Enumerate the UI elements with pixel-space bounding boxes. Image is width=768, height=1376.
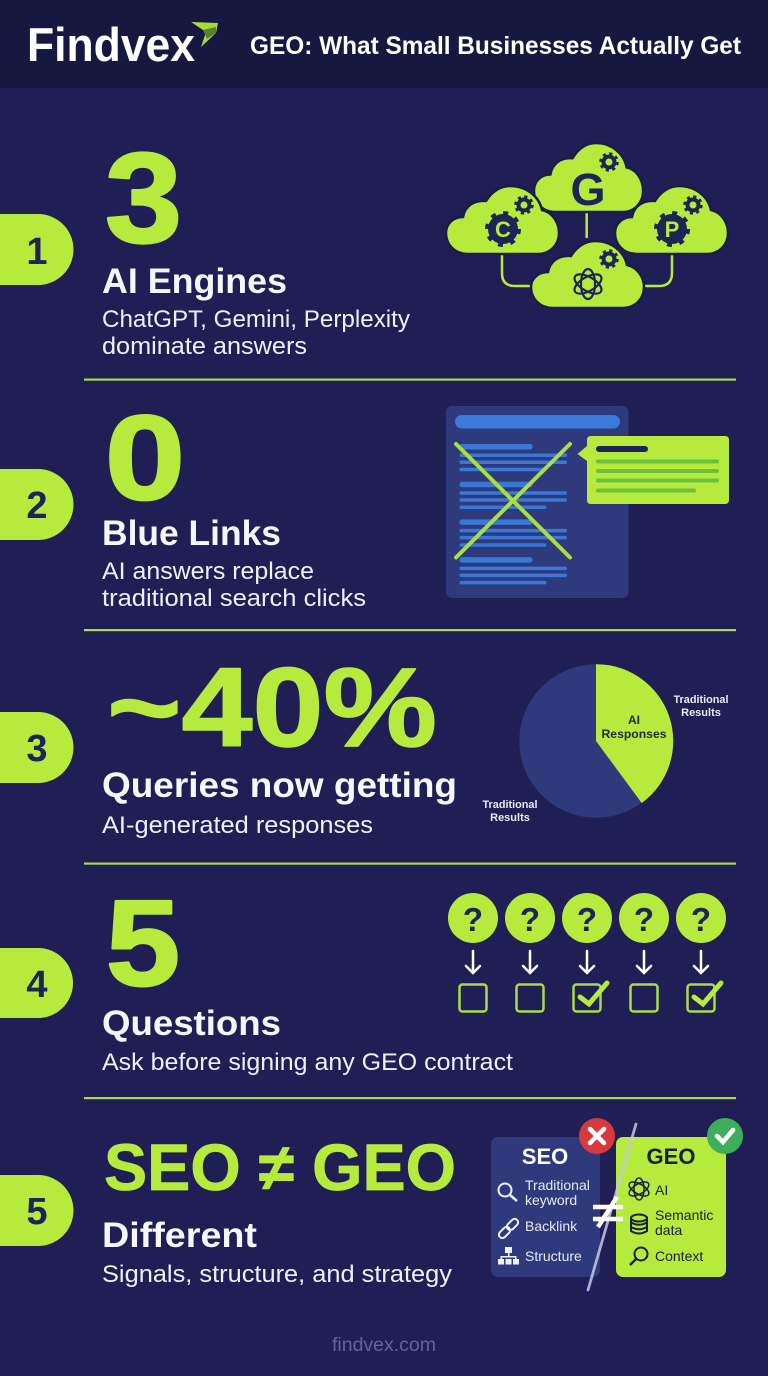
big stat 3: 3 — [105, 127, 182, 270]
icon: not-equal sign — [593, 1197, 623, 1227]
big stat 5: 5 — [106, 875, 180, 1011]
cloud: ChatGPT C: C — [495, 217, 511, 242]
card: SEO: keyword — [525, 1192, 577, 1208]
pie chart: Responses — [602, 727, 667, 741]
footer url: findvex.com — [332, 1335, 436, 1356]
illustration: question checklist: ? — [691, 901, 711, 938]
card: GEO: AI — [655, 1182, 668, 1198]
illustration: question checklist: ? — [463, 901, 483, 938]
cloud: OpenAI knot — [531, 241, 644, 308]
description: traditional search clicks — [102, 585, 366, 612]
description: Ask before signing any GEO contract — [102, 1049, 513, 1076]
illustration: question checklist: ? — [577, 901, 597, 938]
panel: section 5 SEO vs GEO — [0, 1118, 743, 1290]
illustration: question checklist: ? — [520, 901, 540, 938]
logo wordmark: Findvex — [27, 18, 195, 71]
pie chart: Results — [681, 707, 721, 719]
pie chart: Traditional — [482, 799, 538, 811]
icon: red cross badge — [579, 1118, 615, 1154]
diagram: connected AI clouds — [446, 143, 728, 308]
comparison: SEO vs GEO cards — [491, 1118, 743, 1290]
number badge 5: 5 — [26, 1191, 48, 1233]
illustration: crossed-out search page with AI answer — [446, 406, 729, 598]
card: GEO: data — [655, 1222, 682, 1238]
panel: section 2 blue links — [0, 391, 729, 612]
description — [102, 306, 411, 360]
number badge 5 — [0, 1175, 74, 1246]
cloud: Gemini — [534, 143, 643, 215]
icon: logo arrow — [191, 22, 218, 47]
description: AI answers replace — [102, 558, 314, 585]
number badge 4: 4 — [26, 964, 48, 1006]
card: GEO: Semantic — [655, 1207, 713, 1223]
heading: Blue Links — [102, 514, 281, 553]
divider slash — [588, 1124, 636, 1290]
description: Signals, structure, and strategy — [102, 1261, 453, 1288]
card: SEO — [491, 1137, 600, 1277]
card: GEO: GEO — [647, 1144, 695, 1169]
title: GEO: What Small Businesses Actually Get — [250, 32, 742, 60]
card: SEO: SEO — [522, 1144, 568, 1169]
cloud: ChatGPT C — [446, 186, 559, 254]
card: GEO — [616, 1137, 726, 1277]
panel: section 1 AI engines — [0, 127, 728, 360]
pie chart: Traditional — [674, 694, 728, 706]
cloud: Perplexity P — [615, 186, 728, 254]
description: ChatGPT, Gemini, Perplexity — [102, 306, 411, 333]
heading: Queries now getting — [102, 766, 457, 805]
pie chart: Results — [490, 812, 530, 824]
illustration: question checklist — [448, 893, 726, 1012]
card: SEO: Structure — [525, 1248, 582, 1264]
cloud: Perplexity P: P — [665, 217, 679, 242]
panel: section 3 query share — [0, 645, 728, 839]
number badge 1: 1 — [26, 231, 48, 273]
icon: green check badge — [707, 1118, 743, 1154]
panel: section 4 questions — [0, 875, 726, 1076]
description: AI-generated responses — [102, 812, 373, 839]
heading: Different — [102, 1216, 257, 1255]
number badge 1 — [0, 214, 74, 285]
header band — [0, 0, 768, 88]
description: dominate answers — [102, 333, 307, 360]
illustration: question checklist: ? — [634, 901, 654, 938]
pie chart — [482, 664, 728, 824]
number badge 3 — [0, 712, 74, 783]
callout: AI answer — [578, 436, 729, 504]
number badge 2: 2 — [26, 485, 48, 527]
number badge 2 — [0, 469, 74, 540]
number badge 3: 3 — [26, 728, 48, 770]
heading: AI Engines — [102, 262, 287, 301]
heading: Questions — [102, 1004, 281, 1043]
card: SEO: Traditional — [525, 1177, 590, 1193]
big stat SEO not equal GEO: SEO ≠ GEO — [104, 1130, 456, 1204]
description — [102, 558, 366, 612]
pie chart: AI — [628, 713, 640, 727]
big stat ~40%: ~40% — [107, 645, 437, 770]
big stat 0: 0 — [105, 391, 185, 525]
card: SEO: Backlink — [525, 1218, 578, 1234]
number badge 4 — [0, 948, 73, 1018]
card: GEO: Context — [655, 1248, 703, 1264]
cloud: Gemini: G — [570, 164, 606, 215]
